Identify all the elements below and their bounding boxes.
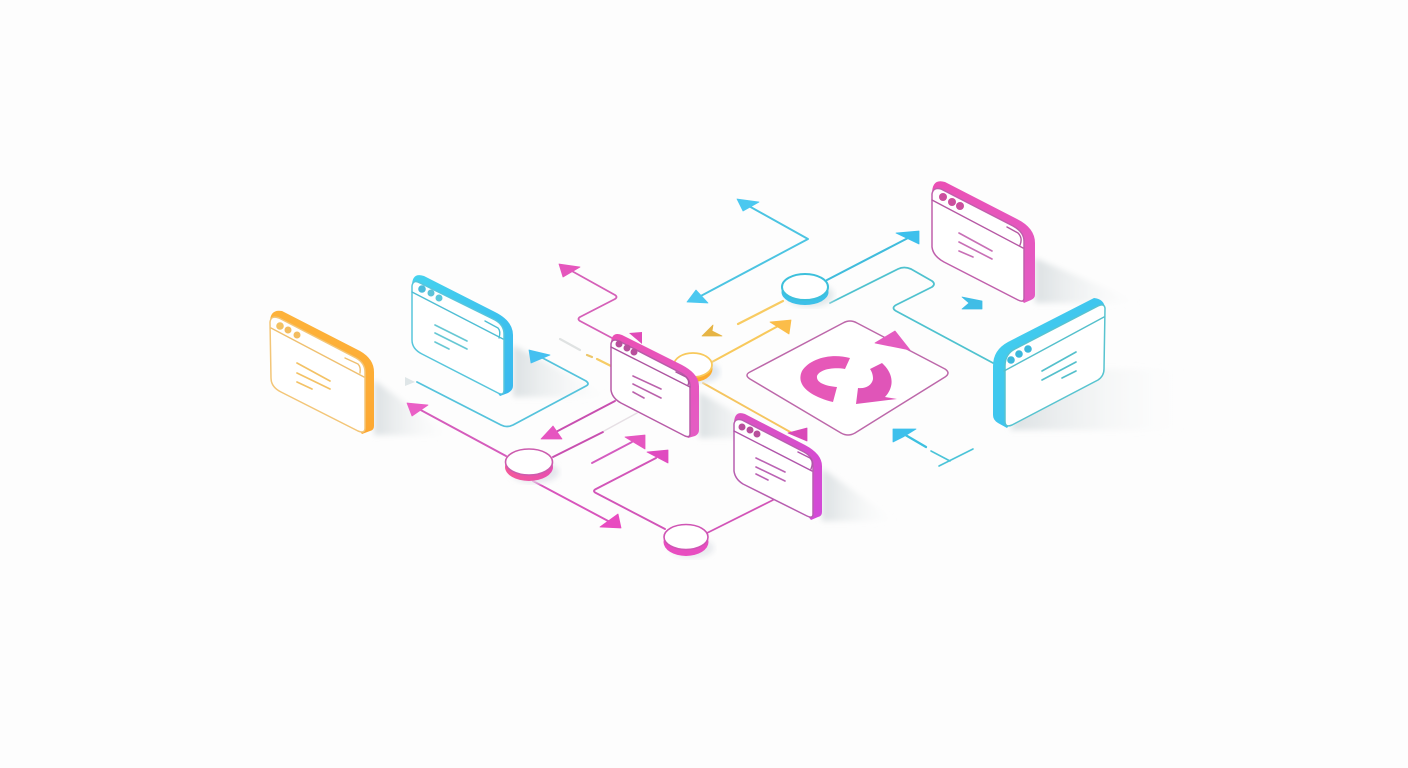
magenta arrow left <box>407 403 506 456</box>
refresh icon right arc <box>856 363 897 404</box>
cyan loop left <box>405 350 588 426</box>
magenta line from left node <box>553 413 637 457</box>
cyan dashed arrow with crossbar <box>893 429 973 466</box>
window shadows <box>374 258 1185 521</box>
connector lines and arrows <box>405 199 993 533</box>
faded yellow line left of center window <box>560 339 611 366</box>
yellow line to bottom window <box>703 383 792 433</box>
cyan top elbow arrow <box>687 199 808 303</box>
magenta elbow arrow to bottom node <box>594 450 668 529</box>
window: pink center <box>611 332 699 438</box>
diamond arrowhead <box>875 331 910 350</box>
short magenta arrow <box>592 435 645 463</box>
arrowhead on window top <box>629 332 642 344</box>
arrowhead over bottom window <box>788 428 807 441</box>
window: pink top right <box>932 181 1035 303</box>
cyan arrow to top window <box>827 231 919 280</box>
node: blue <box>782 274 834 307</box>
window: magenta bottom <box>734 413 822 520</box>
magenta top elbow arrow <box>559 264 616 338</box>
magenta line bottom node to window <box>707 500 773 533</box>
cyan loop to right window <box>830 268 993 363</box>
magenta arrow down right <box>533 481 621 528</box>
magenta arrow from center window <box>541 401 615 439</box>
yellow small arrow <box>702 325 722 336</box>
window: blue right <box>993 298 1105 428</box>
refresh icon left arc <box>800 356 850 402</box>
node: orange <box>674 353 720 383</box>
yellow dash line upper <box>738 301 783 324</box>
diamond outline <box>747 321 948 435</box>
node: pink left <box>505 449 559 483</box>
diamond refresh panel <box>747 321 948 435</box>
yellow arrow up <box>712 320 791 362</box>
small cyan arrow <box>962 297 982 309</box>
window: orange <box>270 311 374 434</box>
node: pink bottom <box>664 524 714 558</box>
window: blue left <box>412 275 513 396</box>
